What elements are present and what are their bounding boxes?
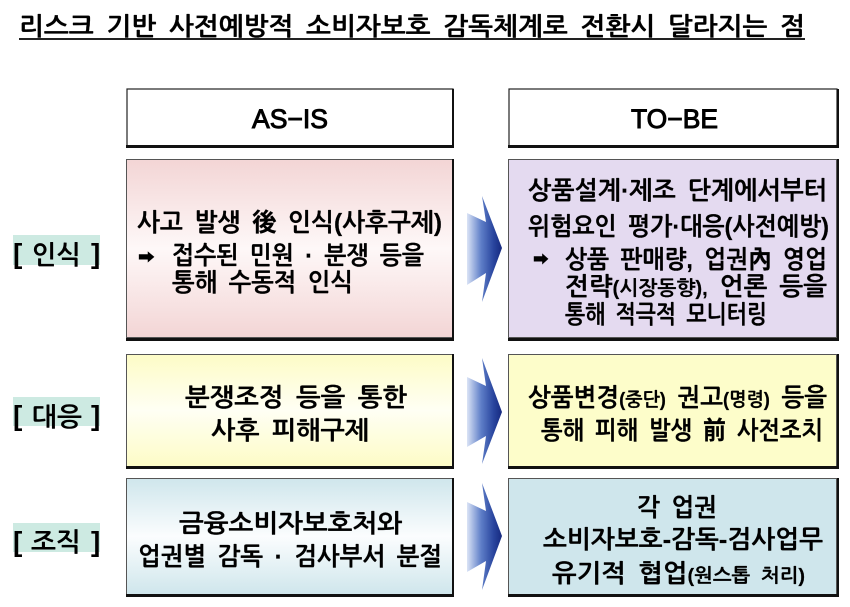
panel: AS-IS 조직: 업권별 감독 · 검사부서 분절 bbox=[138, 543, 442, 571]
arrow: 조직 bbox=[467, 483, 502, 590]
panel: TO-BE 인식: 통해 적극적 모니터링 bbox=[565, 301, 767, 329]
panel: TO-BE 인식: ➡ bbox=[533, 252, 549, 269]
header: AS-IS: AS−IS bbox=[252, 104, 328, 134]
row label: 대응: 대응 bbox=[32, 402, 82, 432]
panel: TO-BE 인식: 전략(시장동향), 언론 등을 bbox=[565, 273, 827, 301]
panel: AS-IS 대응 bbox=[126, 354, 454, 469]
panel: AS-IS 대응: 사후 피해구제 bbox=[211, 417, 369, 445]
row label: 조직: ] bbox=[91, 526, 100, 557]
header: TO-BE: TO−BE bbox=[631, 104, 718, 134]
header: TO-BE bbox=[508, 89, 839, 148]
title: 리스크 기반 사전예방적 소비자보호 감독체계로 전환시 달라지는 점 bbox=[19, 13, 805, 41]
row label: 조직: 조직 bbox=[31, 527, 81, 557]
panel: AS-IS 인식: 사고 발생 後 인식(사후구제) bbox=[137, 209, 442, 237]
header: AS-IS bbox=[126, 89, 454, 148]
row label: 대응: ] bbox=[91, 400, 100, 431]
panel: AS-IS 조직: 금융소비자보호처와 bbox=[179, 510, 403, 538]
row label: 인식: 인식 bbox=[32, 240, 81, 270]
panel: TO-BE 대응: 통해 피해 발생 前 사전조치 bbox=[541, 417, 823, 445]
panel: TO-BE 인식: 상품 판매량, 업권內 영업 bbox=[565, 246, 827, 274]
panel: AS-IS 인식 bbox=[126, 159, 454, 341]
panel: AS-IS 대응: 분쟁조정 등을 통한 bbox=[185, 384, 408, 412]
row label: 인식: ] bbox=[91, 238, 100, 269]
row label: 대응: [ bbox=[13, 400, 22, 431]
panel: TO-BE 대응: 상품변경(중단) 권고(명령) 등을 bbox=[528, 384, 827, 412]
panel: TO-BE 조직 bbox=[508, 478, 839, 597]
panel: TO-BE 조직: 유기적 협업 (원스톱 처리) bbox=[552, 560, 805, 588]
panel: TO-BE 조직: 각 업권 bbox=[637, 494, 717, 522]
panel: AS-IS 인식: ➡ bbox=[138, 250, 155, 267]
row label: 대응 bbox=[13, 397, 100, 432]
panel: TO-BE 대응 bbox=[508, 354, 839, 469]
panel: TO-BE 인식 bbox=[508, 159, 839, 341]
panel: AS-IS 조직 bbox=[126, 478, 454, 597]
row label: 조직 bbox=[13, 523, 100, 557]
panel: AS-IS 인식: 접수된 민원 · 분쟁 등을 bbox=[172, 242, 424, 270]
panel: TO-BE 인식: 위험요인 평가·대응(사전예방) bbox=[528, 213, 829, 241]
row label: 인식: [ bbox=[13, 238, 22, 269]
panel: TO-BE 인식: 상품설계·제조 단계에서부터 bbox=[528, 177, 827, 205]
row label: 조직: [ bbox=[13, 526, 22, 557]
panel: TO-BE 조직: 소비자보호-감독-검사업무 bbox=[543, 526, 823, 554]
row label: 인식 bbox=[13, 235, 100, 270]
arrow: 인식 bbox=[467, 196, 502, 302]
arrow: 대응 bbox=[467, 358, 502, 464]
panel: AS-IS 인식: 통해 수동적 인식 bbox=[172, 269, 353, 297]
